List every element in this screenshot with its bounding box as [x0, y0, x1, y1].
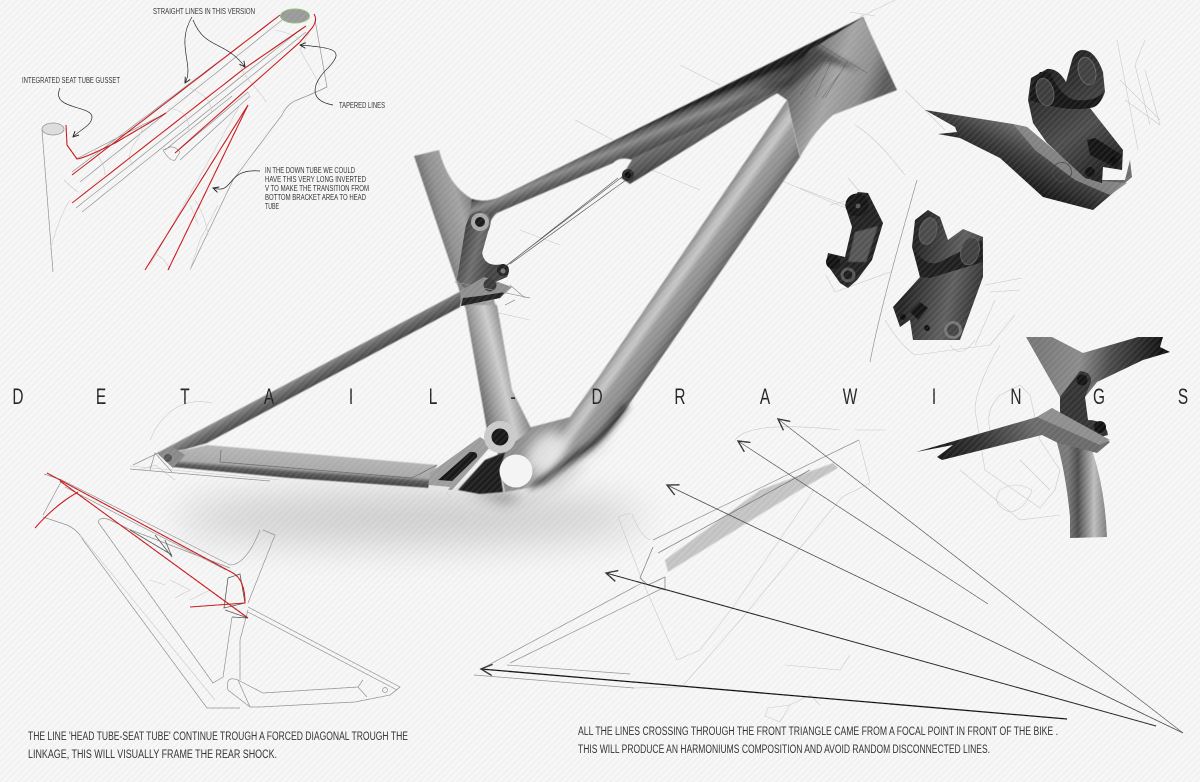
caption: forced diagonal	[28, 731, 408, 761]
callout: down tube note	[265, 165, 369, 211]
seatstay	[157, 290, 463, 453]
curved leader arrows	[58, 17, 336, 189]
callout: tapered lines: TAPERED LINES	[339, 100, 385, 110]
shock strut	[621, 80, 800, 184]
sketch: top tube construction with red lines	[42, 9, 336, 272]
dark outer edge of down tube near bottom bracket	[528, 405, 630, 490]
part: seat tube with rocker and seatstay	[916, 337, 1170, 538]
caption: focal point: THIS WILL PRODUCE AN HARMONIUMS COMPOSITION AND AVOID RANDOM DISCONNECTED LINES.	[578, 744, 990, 756]
construction sketch lines around frame	[130, 0, 945, 497]
dark wedge between yoke and bottom bracket	[458, 452, 505, 494]
soft dark shading below bottom bracket	[465, 395, 640, 503]
callout: down tube note: BOTTOM BRACKET AREA TO HEAD	[265, 192, 366, 202]
part: medium linkage yoke	[885, 210, 1022, 355]
pencil frame outline	[474, 427, 885, 722]
main rendered bike frame	[130, 0, 945, 503]
pencil line between parts	[870, 180, 917, 362]
caption: focal point	[578, 726, 1058, 756]
caption: focal point: ALL THE LINES CROSSING THROUGH THE FRONT TRIANGLE CAME FROM A FOCAL POINT IN FRONT OF THE BIKE .	[578, 726, 1058, 738]
chainstay yoke with window	[428, 437, 492, 491]
down tube	[495, 100, 800, 492]
rocker link	[457, 211, 509, 292]
callout: down tube note: IN THE DOWN TUBE WE COULD	[265, 165, 355, 175]
sketch lines: frame pencil	[42, 17, 327, 272]
callout: down tube note: HAVE THIS VERY LONG INVERTED	[265, 174, 366, 184]
bottom bracket circle	[500, 454, 532, 488]
sketch: focal point construction	[474, 419, 1183, 733]
focal arrows	[481, 419, 1183, 733]
linkage wedge	[455, 277, 530, 306]
shock stroke lines	[503, 177, 626, 268]
part: linkage with seatstay wedge	[925, 40, 1160, 210]
chainstay inner panel line	[220, 450, 437, 478]
caption: forced diagonal: LINKAGE, THIS WILL VISUALLY FRAME THE REAR SHOCK.	[28, 749, 277, 761]
callout: down tube note: V TO MAKE THE TRANSITION FROM	[265, 183, 369, 193]
pencil hatch on head junction	[800, 43, 867, 98]
sketch: forced diagonal side view	[35, 473, 400, 708]
title: detail drawings: DETAIL-DRAWINGS	[12, 385, 1188, 410]
seat tube lower	[465, 305, 532, 445]
rear dropout	[130, 447, 270, 481]
chainstay	[157, 445, 437, 488]
callout: down tube note: TUBE	[265, 201, 279, 211]
red diagonal lines	[35, 473, 248, 618]
red design lines	[66, 14, 316, 270]
ground shadow under frame	[175, 492, 645, 544]
dark shading at head junction	[720, 45, 860, 112]
top tube beam	[468, 17, 880, 232]
highlight at bottom bracket junction	[518, 424, 572, 480]
seat tube upper	[414, 150, 497, 310]
strut pivot	[622, 169, 634, 181]
caption: forced diagonal: THE LINE 'HEAD TUBE-SEAT TUBE' CONTINUE TROUGH A FORCED DIAGONAL TROUGH THE	[28, 731, 408, 743]
callout: straight lines: STRAIGHT LINES IN THIS VERSION	[153, 6, 255, 16]
part: small rocker link	[800, 178, 890, 292]
part: sketch behind right assembly	[960, 345, 1060, 520]
head tube junction	[777, 17, 897, 157]
rendered parts: three quarter rocker pieces	[800, 40, 1170, 538]
pencil frame outline	[43, 474, 400, 708]
green highlighted head tube ellipse	[280, 9, 310, 23]
main pivot	[484, 421, 516, 453]
callout: seat tube gusset: INTEGRATED SEAT TUBE GUSSET	[22, 75, 120, 85]
